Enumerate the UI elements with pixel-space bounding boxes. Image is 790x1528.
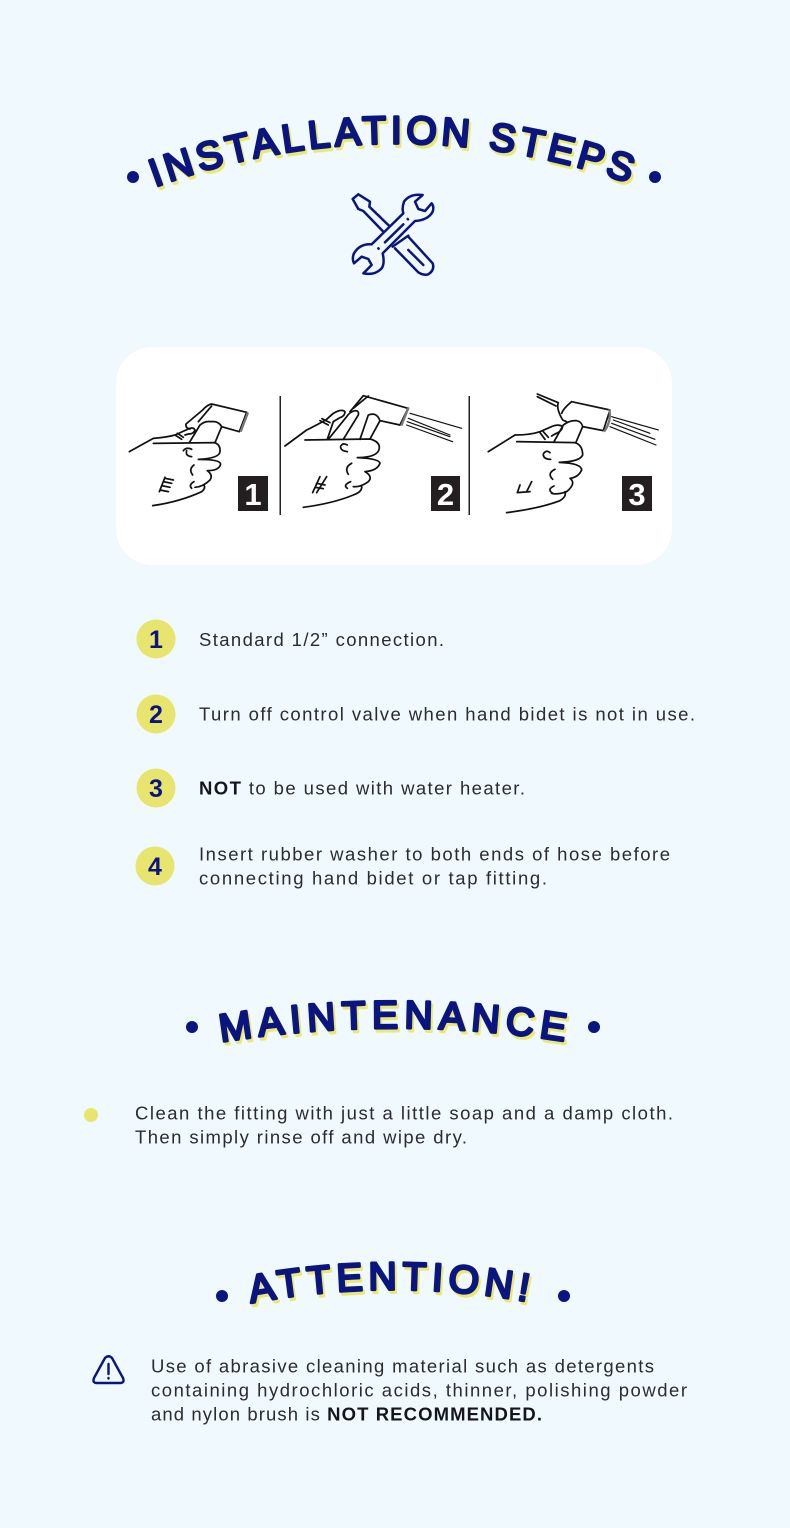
- badge: panel number 3: 3: [628, 477, 646, 512]
- badge: panel number 3: [622, 476, 652, 512]
- step 4: [136, 844, 670, 888]
- illustration: hand step 3: [488, 394, 658, 513]
- step 1: Standard 1/2” connection.: [199, 629, 444, 650]
- step 3: [136, 768, 525, 808]
- heading: installation steps: INSTALLATION STEPS: [154, 118, 637, 190]
- maintenance text: Then simply rinse off and wipe dry.: [135, 1126, 467, 1148]
- step 3: 3: [149, 775, 163, 803]
- step 4: connecting hand bidet or tap fitting.: [199, 868, 547, 888]
- step 2: 2: [149, 701, 163, 729]
- heading: attention: ATTENTION!: [252, 1264, 532, 1308]
- badge: panel number 1: [238, 476, 268, 512]
- step 4: 4: [148, 853, 162, 881]
- attention text: and nylon brush is NOT RECOMMENDED.: [151, 1404, 542, 1424]
- maintenance text: [84, 1102, 673, 1148]
- icon: warning triangle: [93, 1356, 124, 1383]
- step 2: Turn off control valve when hand bidet is not in use.: [199, 704, 695, 724]
- heading: installation steps: INSTALLATION STEPS: [148, 115, 635, 188]
- badge: panel number 1: 1: [244, 477, 262, 512]
- icon: crossed screwdriver and wrench: [353, 194, 433, 275]
- step 3: NOT to be used with water heater.: [199, 778, 525, 798]
- attention text: Use of abrasive cleaning material such as detergents: [151, 1356, 654, 1376]
- heading: maintenance: MAINTENANCE: [219, 1000, 568, 1043]
- badge: panel number 2: [431, 476, 460, 512]
- attention text: containing hydrochloric acids, thinner, polishing powder: [151, 1380, 687, 1400]
- step 1: [136, 620, 444, 658]
- attention text: [151, 1356, 687, 1424]
- heading: attention: ATTENTION!: [250, 1261, 530, 1304]
- illustration: hand step 2: [285, 396, 462, 507]
- badge: panel number 2: 2: [437, 477, 454, 512]
- maintenance text: Clean the fitting with just a little soap and a damp cloth.: [135, 1102, 673, 1124]
- panel: illustrated steps: [116, 347, 672, 565]
- step 4: Insert rubber washer to both ends of hose before: [199, 844, 670, 864]
- illustration: hand step 1: [129, 404, 248, 506]
- step 1: 1: [149, 626, 163, 654]
- step 2: [136, 694, 695, 734]
- heading: maintenance: MAINTENANCE: [224, 1002, 570, 1046]
